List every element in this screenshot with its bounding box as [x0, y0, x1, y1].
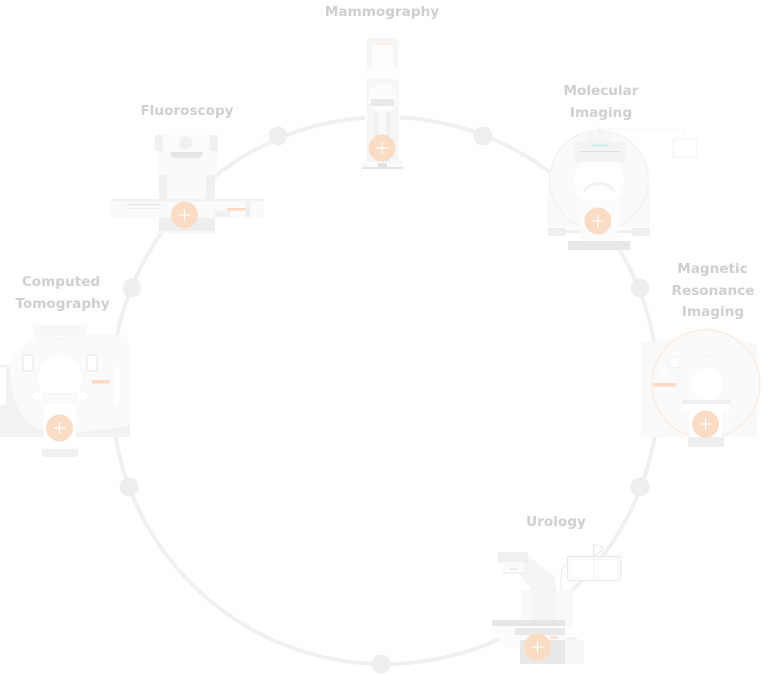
machine: fluoroscopy: [111, 135, 264, 233]
heading: Mammography: Mammography: [325, 4, 439, 20]
machine: magnetic resonance imaging: [641, 330, 760, 447]
heading: Fluoroscopy: Fluoroscopy: [140, 103, 234, 119]
machine: mammography: [362, 38, 403, 168]
machine: molecular imaging: [547, 127, 696, 250]
heading: Molecular Imaging: Molecular: [563, 83, 639, 99]
heading: Computed Tomography: Tomography: [15, 296, 110, 312]
machine: urology: [492, 544, 620, 664]
heading: Urology: Urology: [526, 514, 586, 530]
button: molecular plus: [584, 208, 612, 234]
button: computed tomography plus: [46, 414, 73, 442]
button: fluoroscopy plus: [171, 202, 198, 228]
heading: Computed Tomography: Computed: [22, 274, 100, 290]
ring node dots: [120, 126, 650, 674]
machine: computed tomography: [0, 322, 130, 457]
ring connecting the modalities: [112, 117, 658, 664]
button: mammography plus: [368, 134, 396, 162]
heading: Magnetic Resonance Imaging: Resonance: [672, 283, 754, 299]
heading: Magnetic Resonance Imaging: Magnetic: [677, 261, 748, 277]
heading: Magnetic Resonance Imaging: Imaging: [682, 304, 744, 320]
button: urology plus: [524, 634, 551, 660]
heading: Molecular Imaging: Imaging: [570, 105, 632, 121]
button: magnetic resonance plus: [692, 410, 719, 438]
